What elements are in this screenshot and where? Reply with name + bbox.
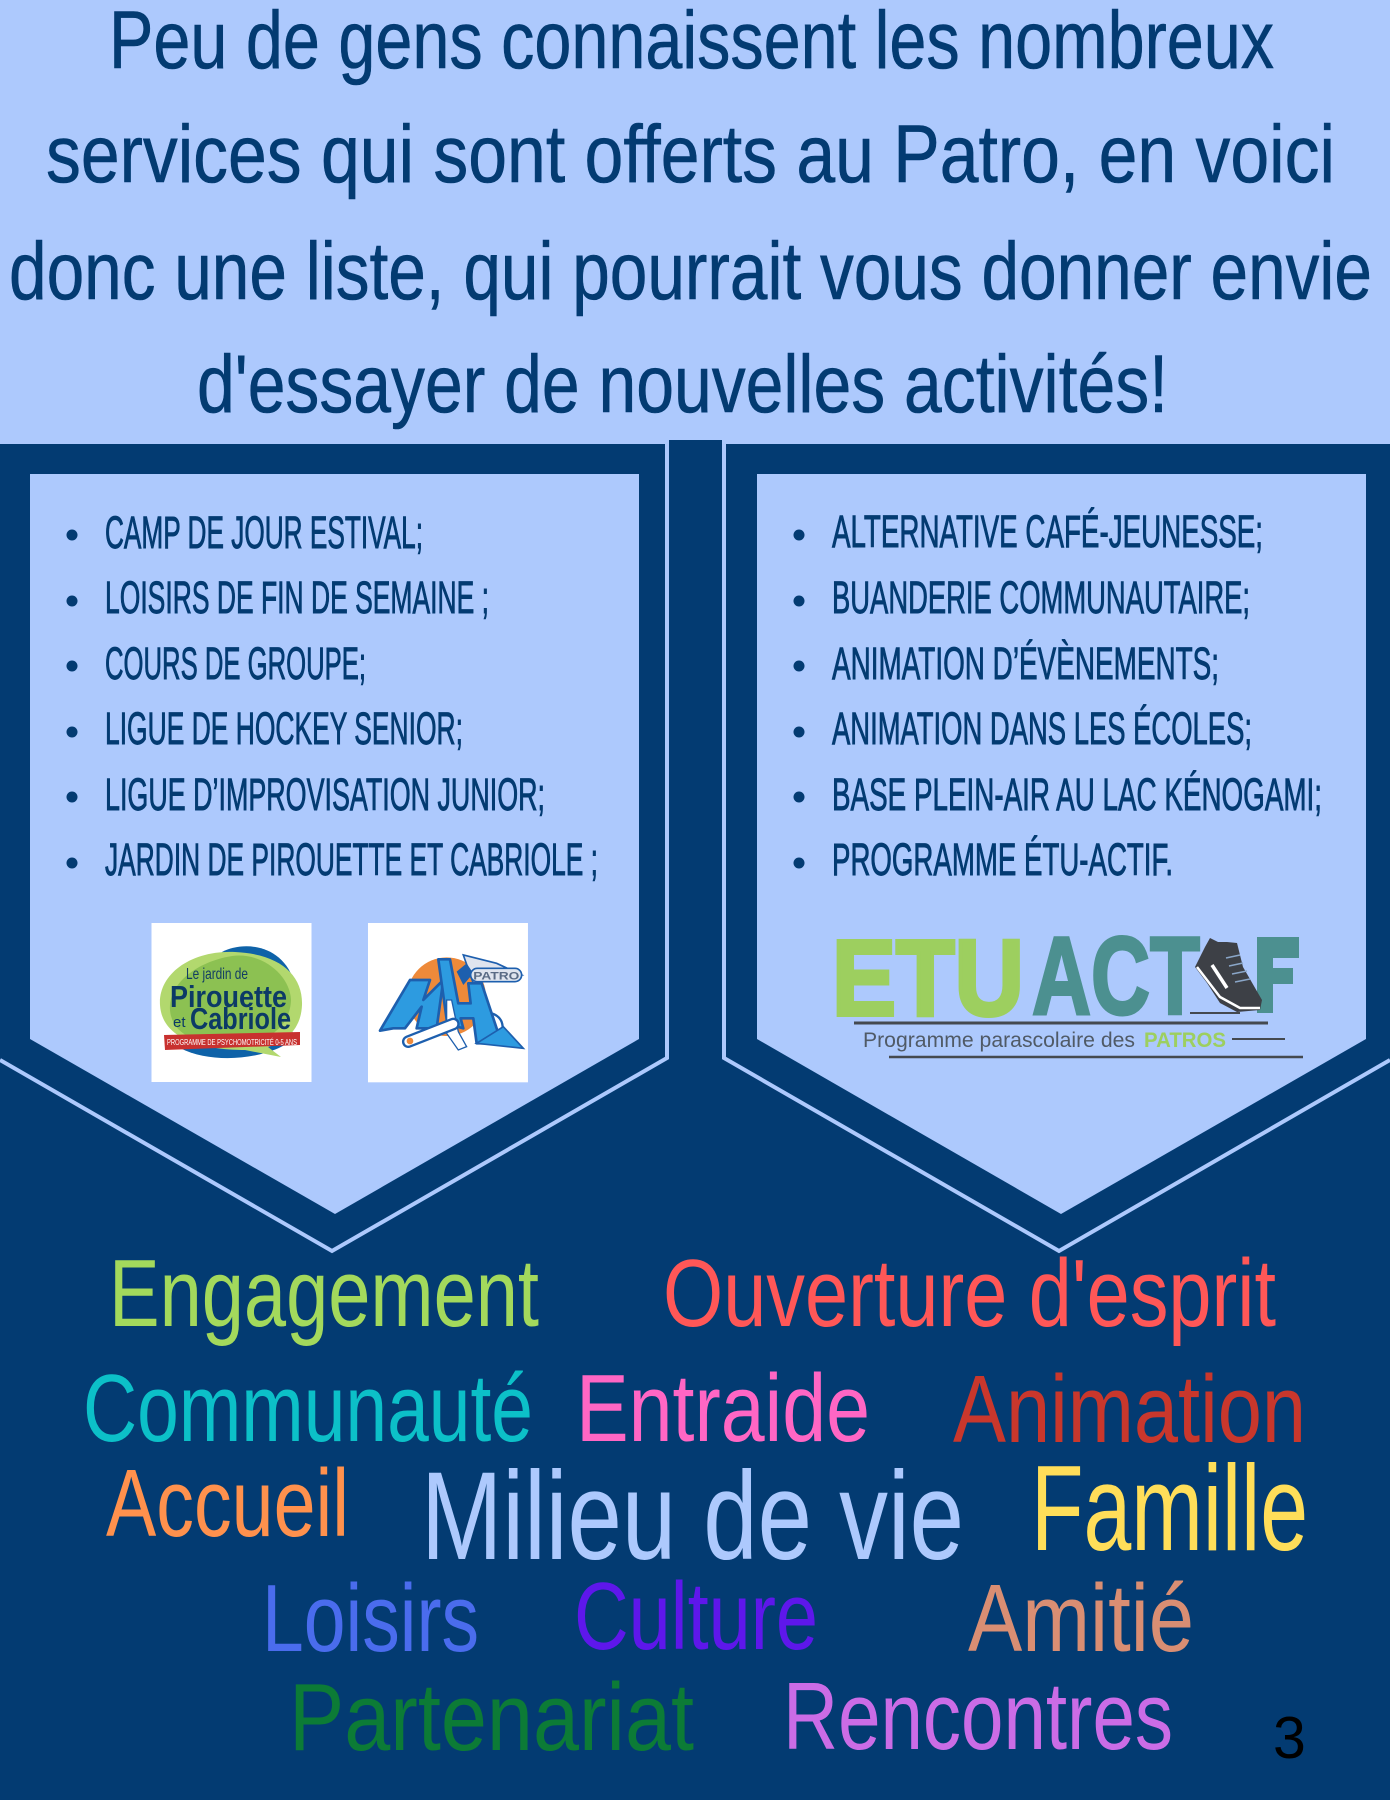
- word cloud: Communauté: [83, 1355, 533, 1462]
- panel: left services: [30, 474, 639, 1214]
- left service list: JARDIN DE PIROUETTE ET CABRIOLE ;: [105, 834, 598, 885]
- word cloud: [83, 1240, 1308, 1771]
- left service list: CAMP DE JOUR ESTIVAL;: [105, 507, 423, 558]
- word cloud: Culture: [574, 1563, 818, 1670]
- logo: Pirouette et Cabriole: Pirouette: [170, 979, 287, 1014]
- centre divider: [669, 440, 722, 1060]
- logo: Pirouette et Cabriole: Le jardin de: [186, 966, 248, 983]
- left service list: COURS DE GROUPE;: [105, 638, 366, 689]
- logo: MH Patro hockey: [368, 923, 528, 1082]
- logo: Etu-Actif: PATROS: [1144, 1029, 1226, 1052]
- left service list: LOISIRS DE FIN DE SEMAINE ;: [105, 572, 489, 623]
- word cloud: Accueil: [106, 1450, 349, 1557]
- title: d'essayer de nouvelles activités!: [197, 339, 1168, 430]
- right service list: PROGRAMME ÉTU-ACTIF.: [832, 834, 1173, 885]
- panel: right services: [757, 474, 1366, 1214]
- right chevron outline: [724, 444, 1390, 1251]
- word cloud: Loisirs: [262, 1565, 479, 1672]
- logo: Etu-Actif: ETU: [832, 917, 1024, 1038]
- logo: Pirouette et Cabriole: PROGRAMME DE PSYCHOMOTRICITÉ 0-5 ANS: [167, 1037, 297, 1047]
- word cloud: Rencontres: [783, 1663, 1173, 1770]
- word cloud: Animation: [953, 1356, 1306, 1463]
- logo: Etu-Actif: [832, 915, 1303, 1057]
- left service list: [66, 507, 598, 885]
- left service list: LIGUE D’IMPROVISATION JUNIOR;: [105, 769, 545, 820]
- logo: Pirouette et Cabriole: Cabriole: [190, 1001, 291, 1036]
- logo: Pirouette et Cabriole: et: [173, 1014, 186, 1031]
- right service list: [794, 506, 1322, 885]
- left chevron outline: [0, 444, 667, 1251]
- word cloud: Entraide: [576, 1355, 870, 1462]
- logo: MH Patro hockey: PATRO: [473, 970, 520, 982]
- word cloud: Partenariat: [289, 1664, 694, 1771]
- logo: Etu-Actif: ACT: [1032, 915, 1200, 1038]
- left service list: LIGUE DE HOCKEY SENIOR;: [105, 703, 463, 754]
- logo: Etu-Actif: Programme parascolaire des: [863, 1029, 1135, 1052]
- word cloud: Amitié: [968, 1565, 1194, 1672]
- word cloud: Engagement: [109, 1240, 539, 1347]
- logo: Pirouette et Cabriole: [152, 923, 312, 1082]
- title: [9, 0, 1372, 430]
- word cloud: Milieu de vie: [421, 1447, 964, 1586]
- header band: [0, 0, 1390, 444]
- page number: 3: [1273, 1705, 1306, 1771]
